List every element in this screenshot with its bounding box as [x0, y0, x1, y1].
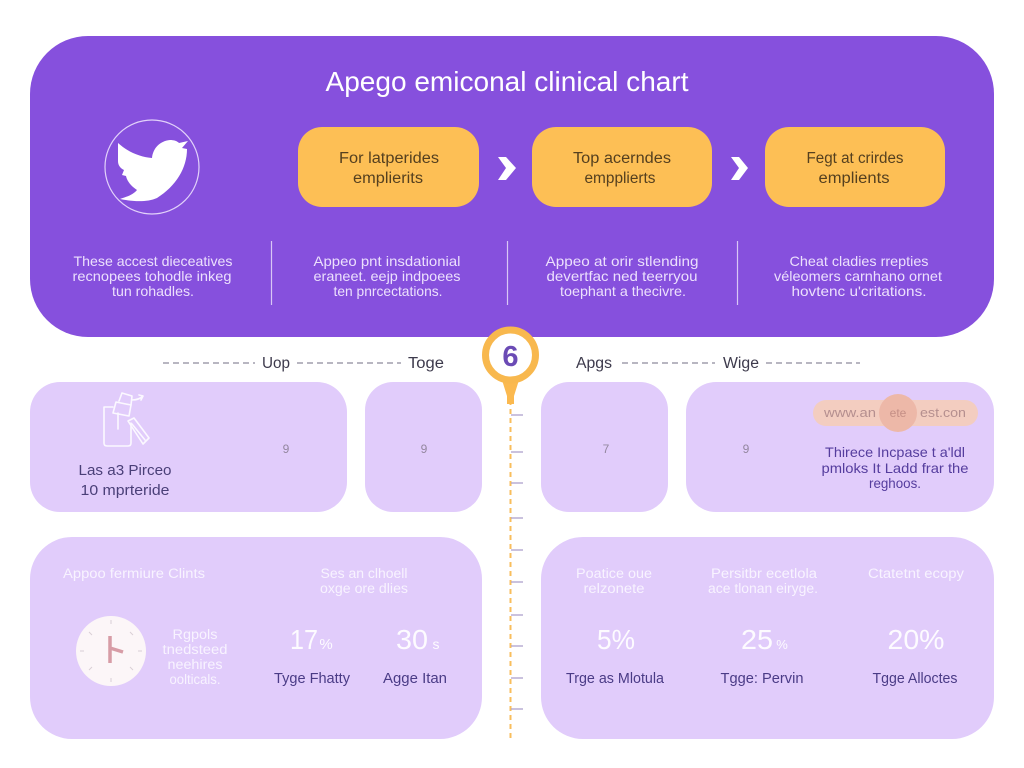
label row: left: Toge [408, 355, 444, 372]
arrow 2 [731, 157, 748, 180]
text block: column 3 [546, 253, 698, 299]
card text [822, 444, 969, 491]
card text: Thirece Incpase t a'ldl [825, 444, 965, 460]
text block: column 1: These accest dieceatives [74, 253, 232, 269]
clock text: Rgpols [172, 627, 218, 642]
text block: column 2 [314, 253, 460, 299]
step box 2: Top acerndes [573, 150, 671, 167]
text block: column 4: hovtenc u'critations. [792, 283, 926, 299]
stat: 30: Agge Itan [383, 670, 447, 687]
url pill [813, 394, 978, 432]
step box 2: empplierts [584, 170, 656, 187]
icon: bird in circle [105, 120, 199, 214]
step box 1 [298, 127, 479, 207]
text block: column 4: véleomers carnhano ornet [774, 268, 942, 284]
step box 3: emplients [818, 170, 890, 187]
label row: right: Wige [723, 355, 759, 372]
column heading 1: relzonete [584, 581, 644, 596]
card 4 [686, 382, 994, 512]
card text: pmloks It Ladd frar the [822, 460, 969, 476]
card 4: 9 [743, 442, 750, 456]
column heading 2 [708, 566, 818, 596]
column heading 1 [576, 566, 652, 596]
card text: reghoos. [869, 475, 921, 491]
text block: column 1: tun rohadles. [112, 283, 194, 299]
step box 1: For latperides [339, 150, 439, 167]
stat: 20%: Tgge Alloctes [872, 670, 958, 687]
stat: 30 [383, 624, 447, 687]
subheading [320, 566, 408, 596]
stat: 25: 25 [741, 624, 773, 655]
icon: clock [76, 616, 146, 686]
clock text: neehires [168, 657, 223, 672]
stat: 5%: 5% [597, 624, 635, 655]
column heading 1: Poatice oue [576, 566, 652, 581]
panel: bottom left [30, 537, 482, 739]
text block: column 1 [72, 253, 232, 299]
stat: 25: Tgge: Pervin [720, 670, 804, 687]
step box 1: emplierits [353, 170, 423, 187]
label row: right [576, 355, 860, 372]
text block: column 2: Appeo pnt insdationial [314, 253, 460, 269]
stat: 5% [566, 624, 665, 687]
column heading 2: ace tlonan eiryge. [708, 581, 818, 596]
card 3 [541, 382, 668, 512]
clock text: tnedsteed [162, 642, 228, 657]
text block: column 3: Appeo at orir stlending [546, 253, 698, 269]
stat: 17%: Tyge Fhatty [274, 670, 350, 687]
text block: column 4 [774, 253, 942, 299]
stat: 25 [720, 624, 804, 687]
stat: 20%: 20% [888, 624, 944, 655]
subheading: oxge ore dlies [320, 581, 408, 596]
url pill: www.an [823, 405, 876, 420]
clock text [162, 627, 228, 687]
marker pin: 6 [502, 341, 519, 373]
card 2: 9 [421, 442, 428, 456]
step box 2 [532, 127, 712, 207]
title: Apego emiconal clinical chart [326, 66, 689, 97]
arrow 1 [498, 157, 516, 180]
stat: 30: 30 [396, 624, 428, 655]
card 1 [30, 382, 347, 512]
label row: left: Uop [262, 355, 290, 372]
column heading 3: Ctatetnt ecopy [868, 566, 964, 581]
column heading 2: Persitbr ecetlola [711, 566, 818, 581]
stat: 17%: % [319, 636, 333, 653]
card text: Las a3 Pirceo [78, 462, 172, 479]
step box 3 [765, 127, 945, 207]
panel: bottom right [541, 537, 994, 739]
step box 3: Fegt at crirdes [806, 150, 904, 167]
stat: 5%: Trge as Mlotula [566, 670, 665, 687]
number: 9 [283, 442, 290, 456]
label row: left [163, 355, 444, 372]
url pill: est.con [920, 405, 966, 420]
card 2 [365, 382, 482, 512]
clock text: oolticals. [170, 672, 220, 687]
text block: column 3: devertfac ned teerryou [546, 268, 698, 284]
label row: right: Apgs [576, 355, 612, 372]
panel heading: Appoo fermiure Clints [63, 566, 205, 581]
subheading: Ses an clhoell [320, 566, 408, 581]
card 1: 10 mprteride [80, 482, 170, 499]
panel: header [30, 36, 994, 337]
stat: 17%: 17 [290, 624, 318, 655]
text block: column 4: Cheat cladies rrepties [790, 253, 928, 269]
text block: column 1: recnopees tohodle inkeg [72, 268, 232, 284]
stat: 17% [274, 624, 350, 687]
url pill: ete [890, 406, 907, 420]
icon: clipboard and tag [104, 393, 149, 446]
text block: column 2: ten pnrcectations. [334, 283, 442, 299]
stat: 25: % [776, 637, 788, 652]
card 3: 7 [603, 442, 610, 456]
marker pin [486, 330, 536, 404]
stat: 30: s [432, 636, 440, 652]
timeline [510, 400, 523, 742]
text block: column 2: eraneet. eejp indpoees [314, 268, 460, 284]
stat: 20% [872, 624, 958, 687]
text block: column 3: toephant a thecivre. [560, 283, 686, 299]
